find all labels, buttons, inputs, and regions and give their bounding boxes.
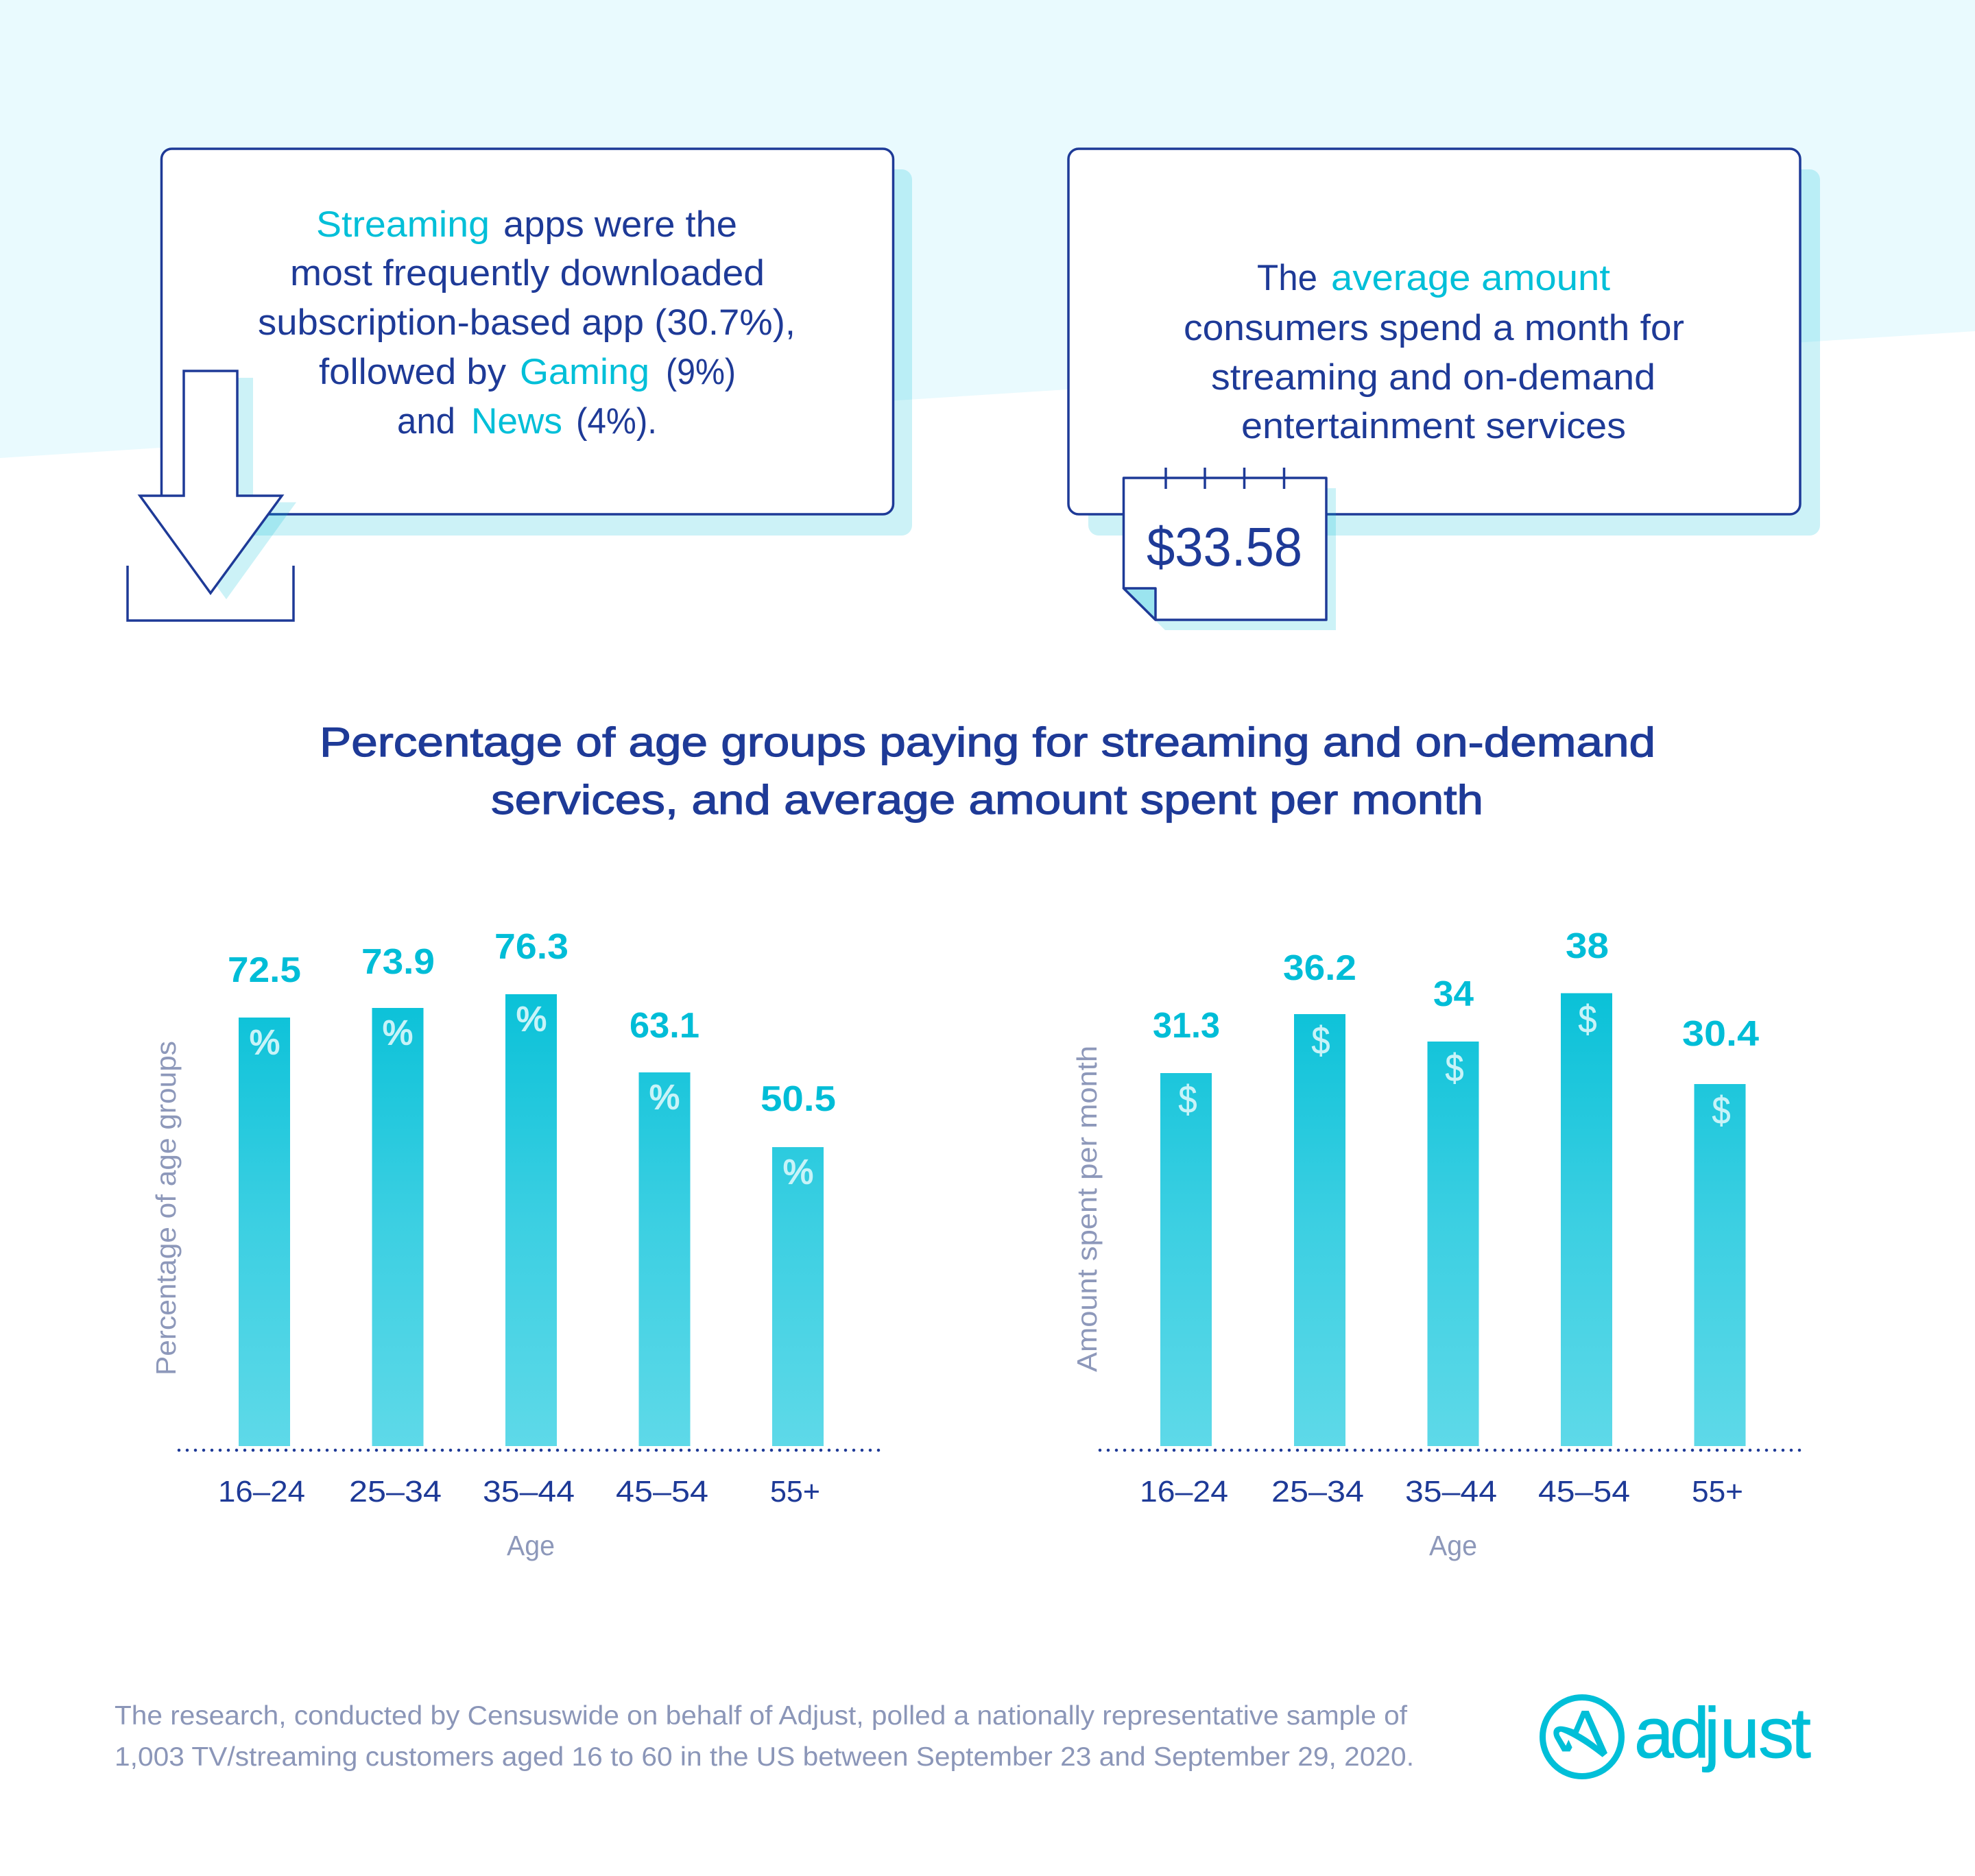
bars bbox=[1160, 993, 1746, 1446]
panel box bbox=[1068, 149, 1800, 514]
bar symbols: $ bbox=[1579, 998, 1596, 1042]
panel shadow bbox=[181, 169, 912, 536]
x axis categories: 16–24 bbox=[218, 1475, 305, 1508]
bar values bbox=[1153, 926, 1759, 1054]
y axis label: Amount spent per month bbox=[1071, 1046, 1103, 1372]
x axis categories: 16–24 bbox=[1140, 1475, 1228, 1508]
bar symbols: $ bbox=[1311, 1019, 1330, 1063]
footnote bbox=[115, 1701, 1414, 1772]
bar values: 31.3 bbox=[1153, 1006, 1220, 1046]
bar values: 73.9 bbox=[361, 942, 435, 982]
text block: streaming apps bbox=[258, 204, 795, 442]
x axis label: Age bbox=[507, 1530, 555, 1561]
text block: streaming apps: most frequently downloaded bbox=[290, 253, 765, 293]
x axis label: Age bbox=[1429, 1530, 1477, 1561]
logo wordmark: adjust bbox=[1634, 1694, 1811, 1773]
bar symbols bbox=[1178, 998, 1731, 1133]
footnote: The research, conducted by Censuswide on behalf of Adjust, polled a nationally representative sample of bbox=[115, 1701, 1407, 1731]
text block: average amount: entertainment services bbox=[1241, 406, 1626, 446]
x axis categories: 45–54 bbox=[616, 1475, 708, 1508]
text block: average amount: average amount bbox=[1331, 258, 1610, 298]
icon: calendar note with amount bbox=[1123, 468, 1336, 630]
text block: streaming apps: (4%). bbox=[576, 401, 657, 442]
bar chart: percentage of age groups bbox=[150, 927, 880, 1561]
logo: adjust bbox=[1543, 1694, 1811, 1776]
bar chart: amount spent per month bbox=[1071, 926, 1802, 1561]
text block: streaming apps: Gaming bbox=[520, 352, 649, 392]
icon: download arrow bbox=[128, 371, 296, 621]
text block: streaming apps: followed by bbox=[319, 352, 507, 392]
title bbox=[320, 719, 1655, 823]
bar values: 30.4 bbox=[1682, 1014, 1759, 1054]
text block: average amount: consumers spend a month for bbox=[1184, 308, 1684, 348]
panel box bbox=[162, 149, 893, 514]
background band bbox=[0, 0, 1975, 458]
panel shadow bbox=[1088, 169, 1820, 536]
bar values: 34 bbox=[1433, 974, 1474, 1014]
x axis categories: 45–54 bbox=[1538, 1475, 1630, 1508]
bar symbols bbox=[250, 1000, 813, 1191]
x axis categories: 35–44 bbox=[1405, 1475, 1497, 1508]
text block: average amount: The bbox=[1257, 258, 1317, 298]
text block: streaming apps: subscription-based app (30.7%), bbox=[258, 302, 795, 343]
text block: streaming apps: and bbox=[397, 401, 455, 442]
icon: calendar note with amount: $33.58 bbox=[1147, 516, 1302, 577]
bar symbols: $ bbox=[1446, 1046, 1463, 1090]
bar symbols: % bbox=[516, 1000, 547, 1038]
bar symbols: % bbox=[783, 1153, 813, 1191]
text block: average amount: streaming and on-demand bbox=[1211, 357, 1655, 398]
y axis label: Percentage of age groups bbox=[150, 1041, 182, 1375]
bar values: 63.1 bbox=[630, 1006, 699, 1046]
bar values: 76.3 bbox=[494, 927, 568, 967]
bar symbols: % bbox=[383, 1013, 413, 1052]
x axis categories bbox=[1140, 1475, 1743, 1508]
bar symbols: $ bbox=[1178, 1078, 1197, 1122]
logo ring and mark bbox=[1543, 1698, 1621, 1776]
bar symbols: $ bbox=[1712, 1089, 1731, 1133]
bars bbox=[239, 994, 824, 1446]
panel: average amount callout bbox=[1068, 149, 1820, 630]
bar values: 36.2 bbox=[1283, 948, 1356, 988]
x axis baseline bbox=[179, 1449, 880, 1452]
footnote: 1,003 TV/streaming customers aged 16 to 60 in the US between September 23 and September 29, 2020. bbox=[115, 1742, 1414, 1772]
text block: streaming apps: (9%) bbox=[666, 352, 736, 392]
x axis categories: 25–34 bbox=[349, 1475, 442, 1508]
x axis categories: 25–34 bbox=[1271, 1475, 1364, 1508]
title: services, and average amount spent per month bbox=[491, 777, 1483, 823]
text block: streaming apps: Streaming bbox=[316, 204, 490, 245]
bar symbols: % bbox=[649, 1078, 680, 1116]
bar values: 38 bbox=[1566, 926, 1609, 966]
x axis categories: 55+ bbox=[1692, 1475, 1743, 1508]
x axis categories: 55+ bbox=[770, 1475, 820, 1508]
bar values: 50.5 bbox=[761, 1079, 836, 1119]
x axis baseline bbox=[1100, 1449, 1802, 1452]
bar values: 72.5 bbox=[228, 950, 301, 990]
panel: streaming apps callout bbox=[128, 149, 912, 621]
x axis categories: 35–44 bbox=[483, 1475, 575, 1508]
bar symbols: % bbox=[250, 1023, 280, 1061]
title: Percentage of age groups paying for streaming and on-demand bbox=[320, 719, 1655, 765]
text block: streaming apps: News bbox=[471, 401, 562, 442]
x axis categories bbox=[218, 1475, 820, 1508]
text block: average amount bbox=[1184, 258, 1684, 446]
bar values bbox=[228, 927, 836, 1119]
text block: streaming apps: apps were the bbox=[503, 204, 737, 245]
